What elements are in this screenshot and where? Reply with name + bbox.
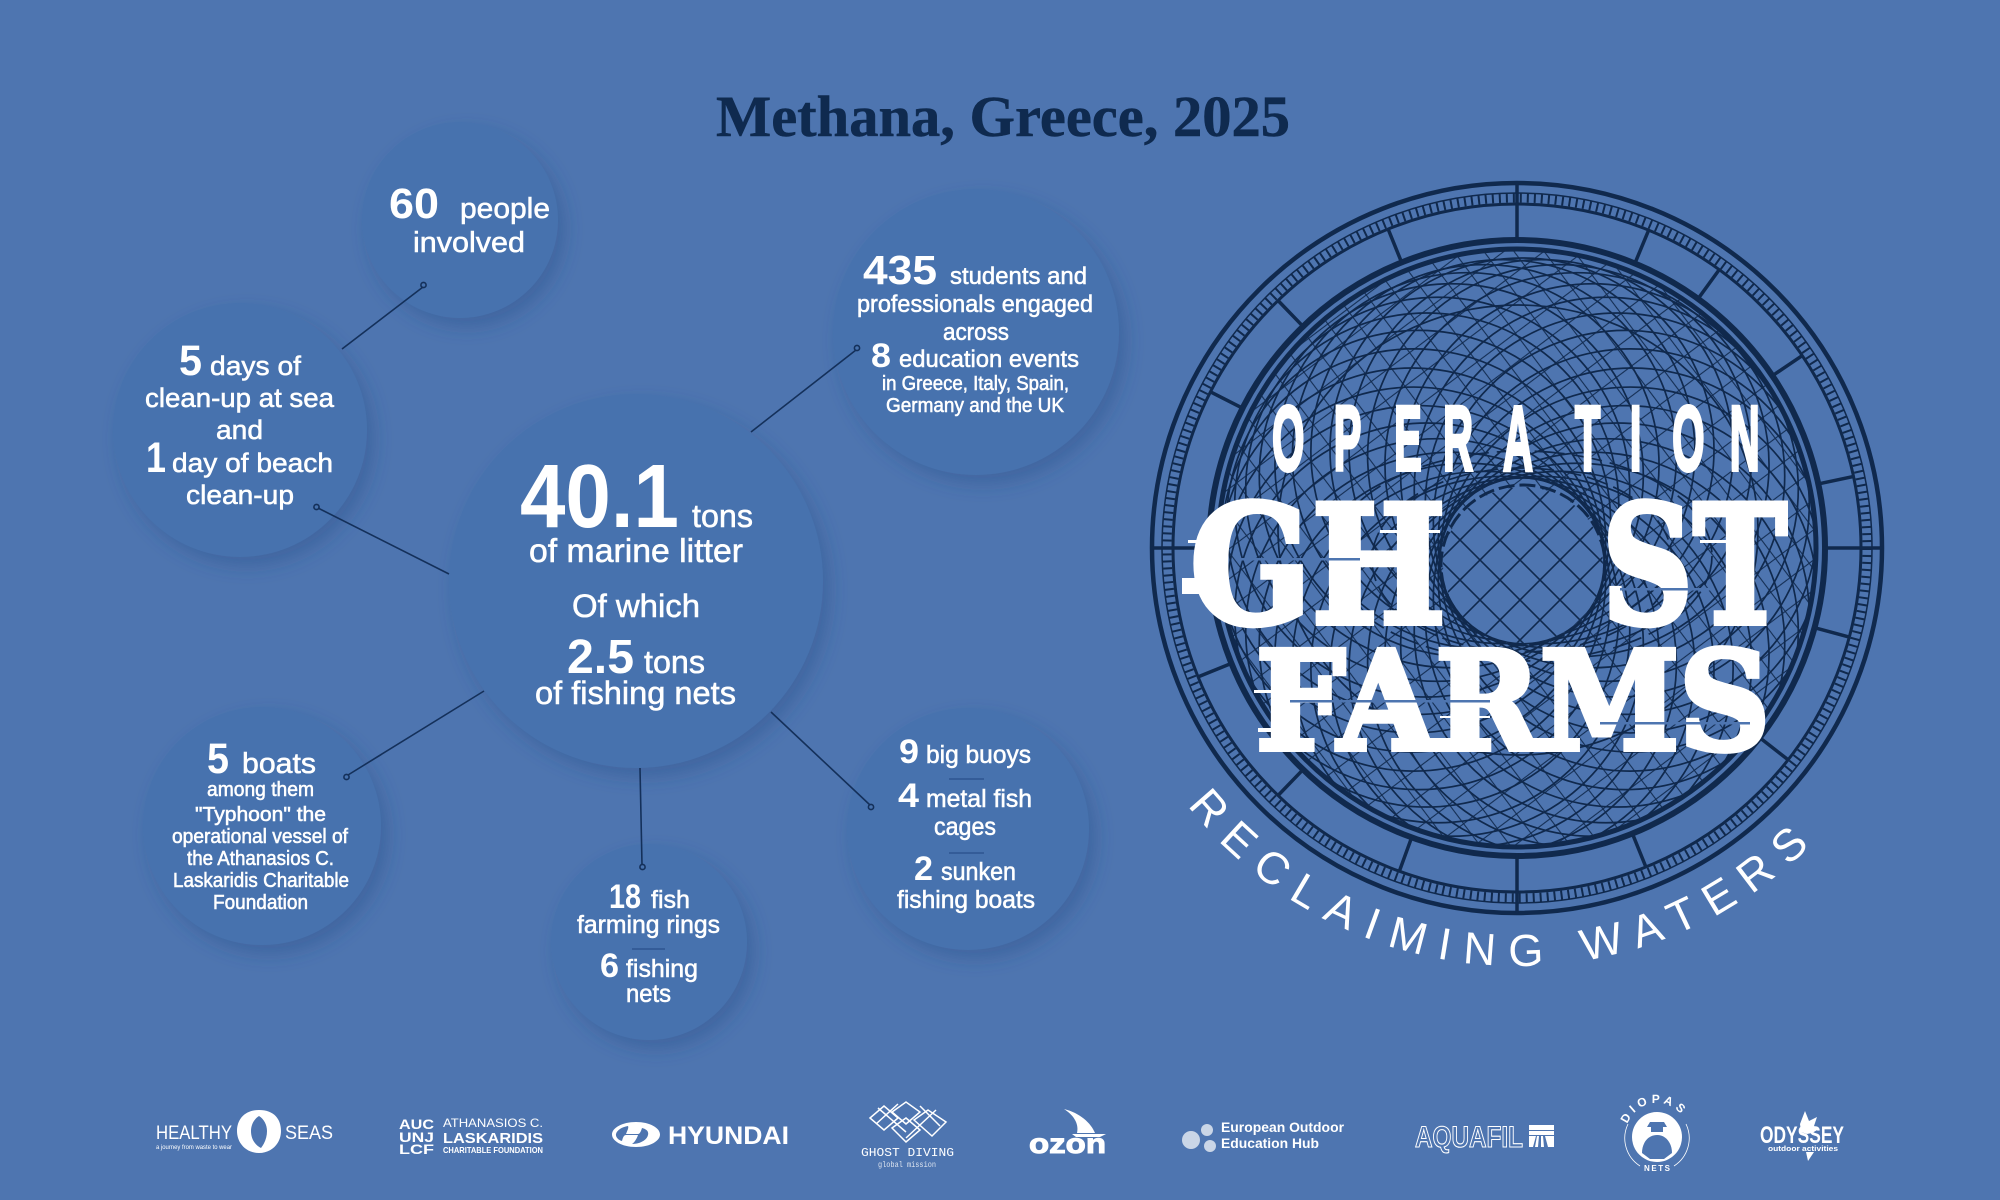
logo: Operation Ghost Farms xyxy=(1150,180,1884,966)
icon: fish farm ring and net xyxy=(1152,183,1882,918)
logo text: OPERATION: OPERATION xyxy=(1272,387,1760,491)
label: education events: education events xyxy=(899,346,1079,373)
label: cages: cages xyxy=(934,813,996,841)
logo: Athanasios C. Laskaridis Charitable Foundation: LASKARIDIS xyxy=(443,1130,543,1147)
glitch cuts xyxy=(1240,558,1750,724)
label: day of beach: day of beach xyxy=(172,448,333,478)
label: Laskaridis Charitable: Laskaridis Charitable xyxy=(173,870,349,892)
stat: 2: 2 xyxy=(914,850,933,888)
label: professionals engaged: professionals engaged xyxy=(857,291,1093,318)
logo text: RECLAIMING WATERS: RECLAIMING WATERS xyxy=(1190,788,1806,966)
logo: Healthy Seas: a journey from waste to wear xyxy=(156,1145,232,1151)
label: operational vessel of: operational vessel of xyxy=(172,826,348,848)
stat: 5 boats: 5 xyxy=(207,735,229,783)
logo: Hyundai: HYUNDAI xyxy=(668,1122,789,1150)
net centre opening xyxy=(1443,487,1603,643)
logo: Aquafil: AQUAFIL xyxy=(1415,1121,1523,1154)
panel: boats xyxy=(143,707,381,945)
logo: Healthy Seas: SEAS xyxy=(285,1123,333,1144)
stat: 18: 18 xyxy=(609,878,641,916)
label: tons of nets: tons xyxy=(644,644,705,680)
label: fishing boats: fishing boats xyxy=(897,886,1035,914)
label: days of: days of xyxy=(210,351,302,381)
circle xyxy=(551,844,747,1040)
logo: Ghost Diving: GHOST DIVING xyxy=(861,1146,954,1160)
label: boats: boats xyxy=(242,748,316,780)
stat: 6: 6 xyxy=(600,947,619,985)
logo text: DIOPAS: DIOPAS xyxy=(1620,1094,1685,1124)
circle xyxy=(362,122,558,318)
logo: Ozon xyxy=(1029,1109,1106,1159)
label: Typhoon: "Typhoon" the xyxy=(195,804,326,826)
label: clean-up: clean-up xyxy=(186,480,294,510)
logo text: ST of GHOST: ST xyxy=(1602,469,1787,662)
logo: Ozon: ozon xyxy=(1029,1128,1106,1159)
logo: European Outdoor Education Hub: Education Hub xyxy=(1221,1135,1319,1151)
connector lines xyxy=(314,282,874,870)
stat: 5 days: 5 xyxy=(179,337,202,385)
panel: 60 people involved xyxy=(362,122,558,318)
circle xyxy=(449,394,823,768)
logo text: FARMS: FARMS xyxy=(1256,622,1770,782)
panel: students and education events xyxy=(833,189,1119,475)
label: among them: among them xyxy=(207,779,314,801)
label: big buoys: big buoys xyxy=(926,741,1031,769)
logo: Healthy Seas xyxy=(156,1110,333,1153)
label: farming rings: farming rings xyxy=(577,911,720,939)
panel: fish farming rings and nets xyxy=(551,844,747,1040)
circle xyxy=(847,708,1089,950)
stat: 1 day: 1 xyxy=(146,434,166,482)
stat: 40.1: 40.1 xyxy=(520,447,679,547)
stat: 435: 435 xyxy=(863,247,937,293)
glitch strokes xyxy=(1182,530,1740,732)
circle xyxy=(833,189,1119,475)
label: tons: tons xyxy=(692,498,753,534)
logo: Diopas Nets xyxy=(1620,1094,1690,1173)
stat: 4: 4 xyxy=(898,777,919,815)
panel: days of clean-up xyxy=(113,303,367,557)
logo: Athanasios C. Laskaridis Charitable Foundation: UNJ xyxy=(399,1129,434,1145)
logo: European Outdoor Education Hub xyxy=(1182,1119,1345,1152)
label: fishing: fishing xyxy=(626,955,698,983)
logo: Healthy Seas: HEALTHY xyxy=(156,1123,232,1144)
label: and: and xyxy=(216,415,263,445)
circle xyxy=(113,303,367,557)
panel: central total xyxy=(449,394,823,768)
label: involved: involved xyxy=(413,227,525,259)
label: clean-up at sea: clean-up at sea xyxy=(145,383,335,413)
logo: Odyssey Outdoor Activities: ODYSSEY xyxy=(1760,1122,1844,1149)
label: of marine litter: of marine litter xyxy=(529,532,743,569)
label: metal fish: metal fish xyxy=(926,785,1032,813)
label: students and: students and xyxy=(950,263,1087,290)
stat: 2.5: 2.5 xyxy=(567,631,634,684)
label: people: people xyxy=(460,193,550,225)
stat: 9: 9 xyxy=(899,733,919,771)
logo: Hyundai xyxy=(612,1122,789,1150)
title: Methana, Greece, 2025 xyxy=(716,84,1290,149)
label: nets: nets xyxy=(626,980,671,1008)
label: countries line 2: Germany and the UK xyxy=(886,395,1065,417)
logo: European Outdoor Education Hub: European Outdoor xyxy=(1221,1119,1345,1135)
label: the Athanasios C.: the Athanasios C. xyxy=(187,848,334,870)
label: of fishing nets: of fishing nets xyxy=(535,675,736,711)
circle xyxy=(143,707,381,945)
label: across: across xyxy=(943,319,1009,346)
label: fish: fish xyxy=(651,886,690,914)
logo: Odyssey Outdoor Activities: outdoor activities xyxy=(1768,1144,1838,1153)
stat: 8: 8 xyxy=(871,337,891,375)
stat: 60: 60 xyxy=(389,180,439,228)
sponsor logos xyxy=(156,1094,1844,1173)
logo: Ghost Diving xyxy=(861,1102,954,1170)
logo text: NETS: NETS xyxy=(1644,1164,1671,1173)
logo: Athanasios C. Laskaridis Charitable Foundation: ATHANASIOS C. xyxy=(443,1116,543,1130)
logo: Athanasios C. Laskaridis Charitable Foundation: CHARITABLE FOUNDATION xyxy=(443,1145,543,1155)
label: Of which: Of which xyxy=(572,588,700,624)
label: sunken: sunken xyxy=(941,858,1016,886)
panel: buoys cages boats xyxy=(847,708,1089,950)
logo text: GH of GHOST: GH xyxy=(1190,469,1446,662)
logo: Athanasios C. Laskaridis Charitable Foundation xyxy=(399,1116,543,1157)
label: Foundation: Foundation xyxy=(213,892,308,914)
logo: Athanasios C. Laskaridis Charitable Foundation: AUC xyxy=(399,1116,434,1132)
logo: Ghost Diving: global mission xyxy=(878,1161,936,1170)
label: countries line 1: in Greece, Italy, Spain, xyxy=(882,373,1069,395)
logo: Athanasios C. Laskaridis Charitable Foundation: LCF xyxy=(399,1141,435,1157)
logo: Odyssey Outdoor Activities xyxy=(1760,1111,1844,1161)
